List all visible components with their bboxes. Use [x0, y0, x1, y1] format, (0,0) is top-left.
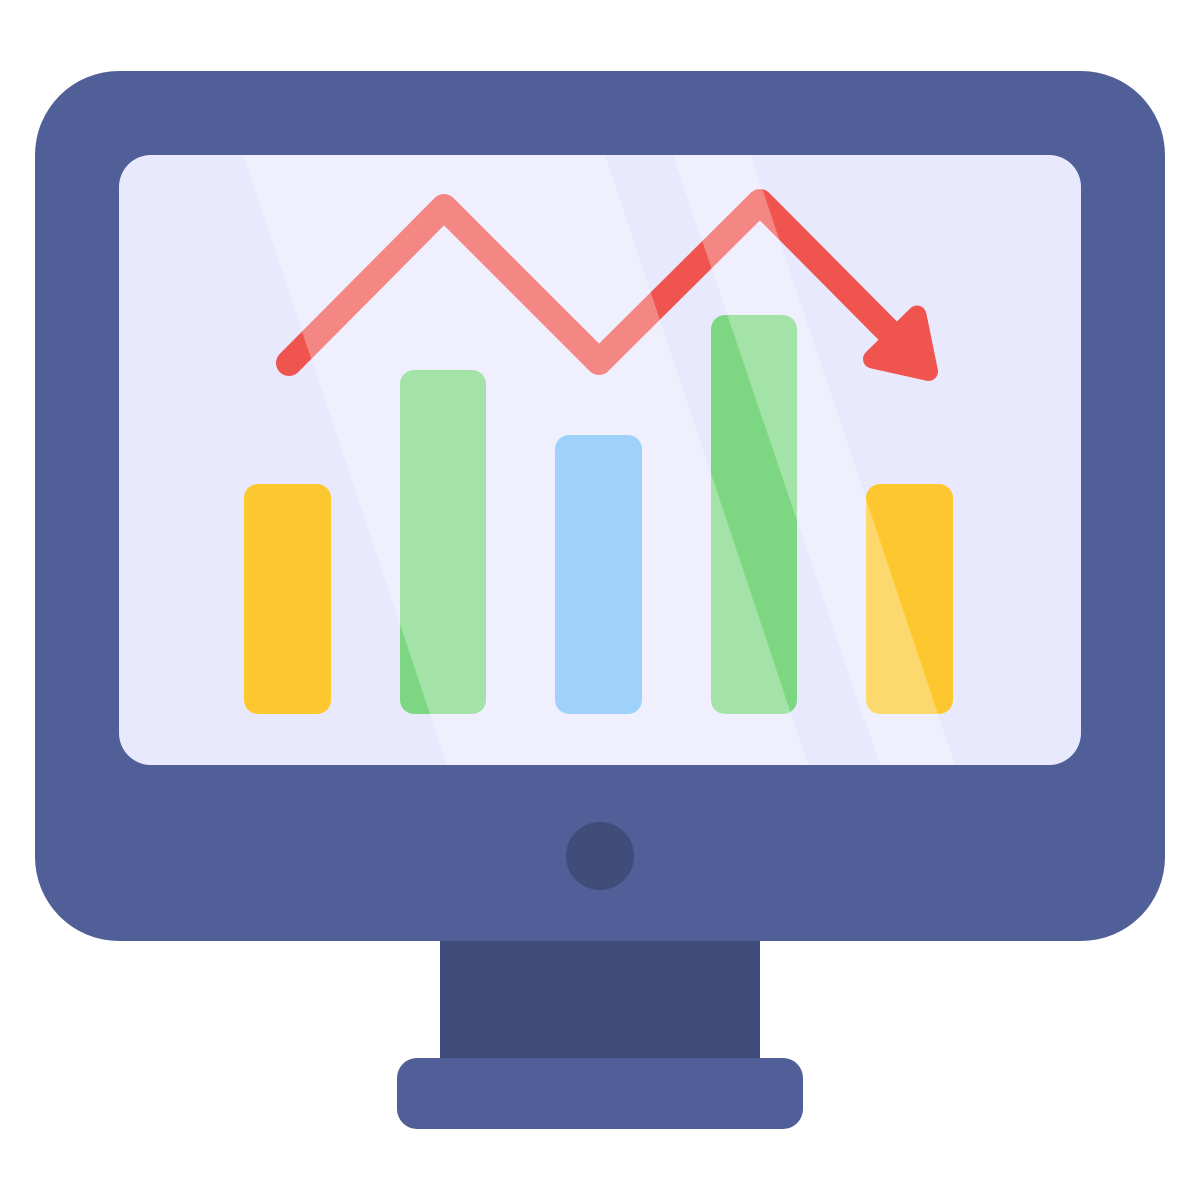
power button: [566, 822, 634, 890]
monitor body: [35, 71, 1165, 941]
trend line: [289, 202, 905, 363]
bar 3: blue: [555, 435, 642, 714]
arrow head: [872, 315, 928, 372]
bar 2: green: [400, 370, 486, 714]
monitor stand neck: [440, 935, 760, 1065]
chart: bars and falling trend line: [244, 202, 953, 714]
glare band 2: [702, 189, 938, 714]
screen background: [119, 155, 1081, 765]
bar 4: green: [711, 315, 797, 714]
screen glare bands: [302, 189, 938, 714]
bar 5: yellow: [866, 484, 953, 714]
monitor stand base: [397, 1058, 803, 1129]
glare band 1: [302, 194, 790, 714]
bar 1: yellow: [244, 484, 331, 714]
